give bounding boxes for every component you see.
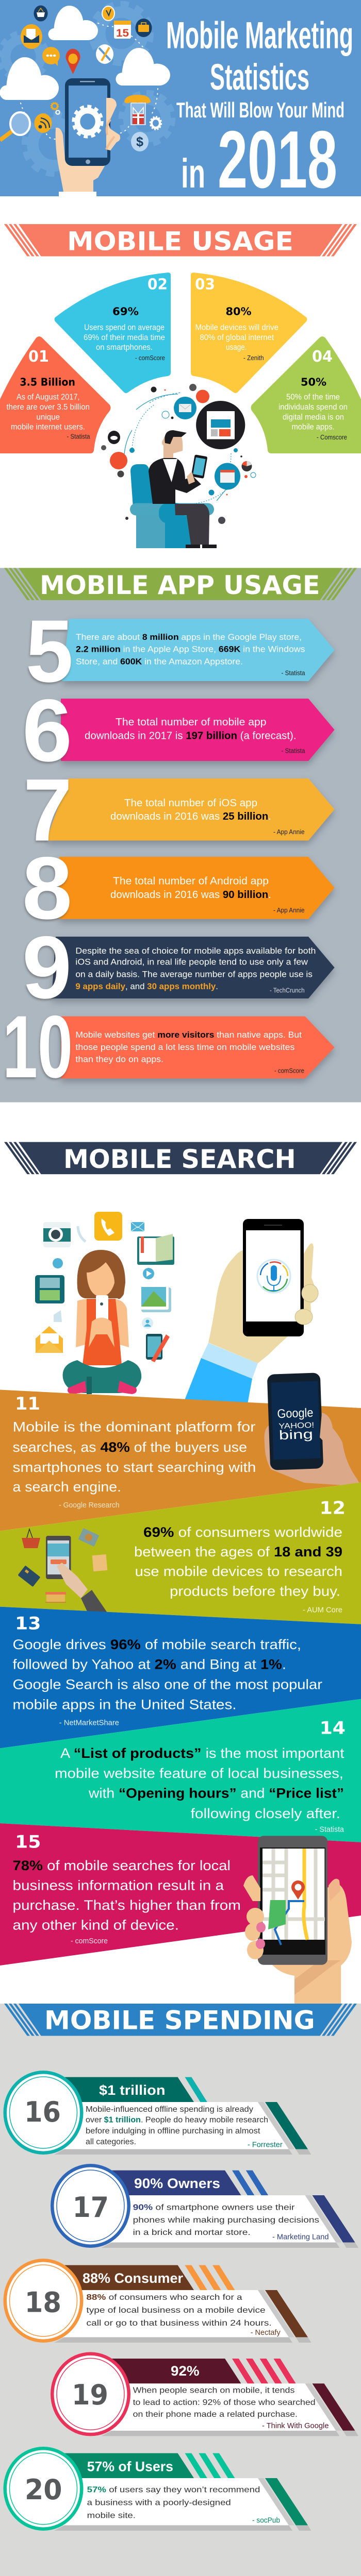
petal 01: there are over 3.5 billion bbox=[6, 403, 90, 412]
petal 03: 80% of global internet bbox=[200, 333, 274, 342]
petal 01: As of August 2017, bbox=[17, 393, 79, 401]
panel: stat 14 bbox=[0, 1699, 361, 1842]
stat 5: 5 bbox=[26, 602, 73, 701]
icon: calendar bbox=[114, 21, 131, 39]
stat 19: 92% bbox=[171, 2363, 200, 2379]
icon: phone tile bbox=[94, 1212, 122, 1241]
stat 20: 57% of users say they won’t recommend bbox=[87, 2485, 260, 2494]
stat 20: 57% of Users bbox=[87, 2459, 173, 2475]
panel: stat 15: business information result in a bbox=[12, 1878, 224, 1893]
icon: envelope bbox=[131, 1222, 144, 1231]
petal 04: 04 bbox=[312, 348, 333, 366]
stat 17 bbox=[51, 2164, 358, 2248]
panel: stat 11: a search engine. bbox=[12, 1479, 121, 1495]
banner: mobile usage bbox=[4, 224, 357, 257]
icon: rss bbox=[34, 113, 52, 133]
icon: briefcase bbox=[135, 19, 152, 37]
panel: stat 15: any other kind of device. bbox=[12, 1918, 179, 1933]
icon: camera bbox=[43, 1222, 71, 1247]
panel: stat 13: Google drives 96% of mobile search traffic, bbox=[12, 1637, 301, 1652]
stat 18: 88% Consumer bbox=[83, 2270, 183, 2286]
illustration: hand holding phone with search engines: bing bbox=[278, 1427, 313, 1443]
icon: dollar bbox=[131, 132, 149, 151]
stat 16: over $1 trillion. People do heavy mobile research bbox=[86, 2115, 268, 2124]
illustration: hand holding phone with search engines: YAHOO! bbox=[278, 1421, 315, 1431]
petal 01: - Statista bbox=[67, 432, 90, 440]
panel: header bbox=[0, 0, 361, 205]
banner: mobile usage: MOBILE USAGE bbox=[67, 227, 293, 257]
panel: stat 11: Mobile is the dominant platform for bbox=[12, 1419, 256, 1434]
stat 9: 9 apps daily, and 30 apps monthly. bbox=[75, 982, 218, 991]
stat 18: call or go to that business within 24 hours. bbox=[86, 2319, 272, 2328]
banner: mobile app usage: MOBILE APP USAGE bbox=[40, 570, 320, 600]
panel: stat 14: mobile website feature of local businesses, bbox=[55, 1766, 343, 1781]
stat 19: - Think With Google bbox=[262, 2422, 329, 2430]
stat 10: - comScore bbox=[274, 1067, 304, 1075]
panel: stat 13: - NetMarketShare bbox=[59, 1718, 119, 1727]
panel: stat 14: - Statista bbox=[315, 1825, 344, 1834]
banner: mobile spending: MOBILE SPENDING bbox=[44, 2006, 315, 2036]
icon: calendar: 15 bbox=[116, 27, 129, 39]
banner: mobile search: MOBILE SEARCH bbox=[63, 1144, 296, 1174]
stat 8: 8 bbox=[22, 839, 72, 938]
title: in bbox=[181, 150, 205, 196]
stat 19: 19 bbox=[72, 2379, 108, 2411]
stat 18 bbox=[3, 2259, 311, 2343]
icon: magnifier bbox=[0, 112, 30, 140]
stat 5: There are about 8 million apps in the Google Play store, bbox=[76, 633, 302, 642]
illustration: hand with voice-search phone bbox=[183, 1219, 318, 1404]
panel: stat 11 bbox=[0, 1372, 361, 1531]
stat 5 bbox=[26, 602, 335, 701]
panel: stat 15: 78% of mobile searches for local bbox=[12, 1858, 231, 1873]
panel: stat 11: searches, as 48% of the buyers use bbox=[12, 1439, 247, 1455]
panel: stat 13 bbox=[0, 1607, 361, 1748]
icon: basket bbox=[34, 5, 47, 22]
petal 02: Users spend on average bbox=[84, 324, 165, 332]
stat 5: Store, and 600K in the Amazon Appstore. bbox=[76, 657, 243, 666]
petal 01: unique bbox=[36, 413, 60, 421]
petal 04: individuals spend on bbox=[278, 403, 348, 412]
petal 03 bbox=[191, 273, 307, 393]
woman bbox=[63, 1250, 141, 1394]
stat 16 bbox=[3, 2071, 311, 2155]
stat 17: 17 bbox=[73, 2191, 109, 2224]
icon: clock bbox=[102, 6, 114, 21]
stat 20: mobile site. bbox=[87, 2512, 136, 2520]
petal 04 bbox=[251, 336, 361, 453]
icon: email bbox=[21, 24, 42, 49]
stat 18: 88% of consumers who search for a bbox=[86, 2293, 242, 2302]
stat 8: The total number of Android app bbox=[113, 876, 269, 887]
petal 01 bbox=[0, 336, 110, 453]
stat 8 bbox=[22, 839, 335, 938]
stat 16: 16 bbox=[24, 2096, 61, 2128]
stat 9: 9 bbox=[22, 918, 72, 1017]
panel: stat 15: - comScore bbox=[71, 1937, 108, 1945]
petal 03: - Zenith bbox=[243, 354, 264, 362]
stat 9 bbox=[22, 918, 335, 1017]
stat 17: phones while making purchasing decisions bbox=[133, 2216, 319, 2225]
panel: stat 15: 15 bbox=[15, 1832, 41, 1852]
stat 16: all categories. bbox=[86, 2138, 136, 2146]
stat 7: 7 bbox=[23, 760, 72, 859]
panel: mobile app usage bbox=[0, 568, 361, 1103]
panel: stat 13: followed by Yahoo at 2% and Bing at 1%. bbox=[12, 1657, 286, 1672]
icon: speech bubble bbox=[42, 47, 60, 66]
panel: mobile spending bbox=[0, 2004, 361, 2576]
petal 01: mobile internet users. bbox=[11, 422, 85, 432]
stat 10: 10 bbox=[3, 997, 73, 1096]
stat 18: - Nectafy bbox=[251, 2329, 281, 2337]
petal 02: 69% bbox=[112, 306, 139, 318]
stat 18: type of local business on a mobile device bbox=[86, 2306, 266, 2315]
panel: mobile usage fan bbox=[0, 273, 361, 548]
stat 10: those people spend a lot less time on mobile websites bbox=[75, 1043, 294, 1052]
stat 6: - Statista bbox=[282, 747, 305, 754]
petal 01: 01 bbox=[28, 348, 49, 366]
icon: pictures bbox=[140, 1286, 171, 1312]
panel: stat 15: purchase. That’s higher than from bbox=[12, 1897, 241, 1913]
panel: stat 12: 69% of consumers worldwide bbox=[143, 1524, 342, 1540]
stat 16: before indulging in offline purchasing in almost bbox=[86, 2127, 260, 2136]
stat 20: - socPub bbox=[252, 2517, 280, 2525]
icon: film bbox=[35, 1275, 64, 1303]
panel: stat 12 bbox=[0, 1482, 361, 1624]
stat 16: Mobile-influenced offline spending is already bbox=[86, 2105, 253, 2114]
stat 6: The total number of mobile app bbox=[116, 717, 266, 728]
stat 9: Despite the sea of choice for mobile apps available for both bbox=[75, 946, 316, 956]
stat 7 bbox=[23, 760, 335, 859]
panel: stat 12: use mobile devices to research bbox=[135, 1564, 342, 1579]
icon: map pin bbox=[66, 49, 80, 74]
icon: dollar: $ bbox=[136, 134, 144, 149]
stat 18: 18 bbox=[25, 2286, 61, 2318]
icon: gift shop bbox=[124, 95, 151, 125]
stat 19 bbox=[51, 2352, 358, 2436]
stat 9: iOS and Android, in real life people tend to use only a few bbox=[75, 958, 308, 967]
panel: stat 12: - AUM Core bbox=[303, 1606, 342, 1615]
panel: stat 13: 13 bbox=[15, 1614, 41, 1634]
stat 7: - App Annie bbox=[273, 828, 305, 836]
petal 03: Mobile devices will drive bbox=[195, 324, 278, 332]
stat 6 bbox=[22, 681, 335, 780]
petal 04: 50% of the time bbox=[286, 393, 340, 401]
stat 19: to lead to action: 92% of those who searched bbox=[133, 2398, 316, 2407]
petal 02: 69% of their media time bbox=[84, 333, 165, 342]
panel: stat 12: between the ages of 18 and 39 bbox=[134, 1544, 342, 1560]
petal 01: 3.5 Billion bbox=[20, 376, 75, 388]
stat 16: - Forrester bbox=[248, 2141, 283, 2149]
stat 20 bbox=[3, 2447, 311, 2531]
icon: tools bbox=[96, 44, 113, 64]
petal 02: - comScore bbox=[135, 354, 165, 362]
panel: stat 15 bbox=[0, 1823, 361, 2004]
petal 04: mobile apps. bbox=[292, 422, 335, 432]
petal 03: 03 bbox=[195, 275, 215, 293]
panel: stat 11: - Google Research bbox=[59, 1501, 120, 1510]
panel: stat 14: following closely after. bbox=[191, 1806, 340, 1821]
panel: stat 14: A “List of products” is the most important bbox=[60, 1745, 344, 1761]
petal 04: digital media is on bbox=[283, 413, 344, 421]
petal 04: - Comscore bbox=[317, 433, 347, 441]
icon: book bbox=[137, 1234, 174, 1265]
stat 9: - TechCrunch bbox=[270, 986, 305, 994]
illustration: hand holding phone with search engines bbox=[264, 1372, 361, 1486]
stat 9: on a daily basis. The average number of apps people use is bbox=[75, 970, 313, 979]
stat 6: 6 bbox=[22, 681, 72, 780]
petal 03: usage. bbox=[226, 343, 247, 352]
icon: dotted links bbox=[21, 23, 158, 139]
illustration: mobile shopping bbox=[18, 1528, 107, 1613]
stat 7: The total number of iOS app bbox=[124, 798, 257, 809]
stat 20: 20 bbox=[25, 2473, 62, 2506]
stat 5: 2.2 million in the Apple App Store, 669K in the Windows bbox=[76, 645, 305, 654]
stat 10: Mobile websites get more visitors than native apps. But bbox=[75, 1030, 302, 1040]
panel: stat 11: 11 bbox=[15, 1394, 40, 1414]
illustration: hand holding phone bbox=[56, 78, 120, 196]
illustration: hand with map phone bbox=[243, 1836, 352, 2004]
illustration: man on armchair with phone bbox=[101, 384, 256, 548]
stat 17: 90% of smartphone owners use their bbox=[133, 2203, 295, 2212]
icon: speech bubble: ••• bbox=[46, 52, 56, 60]
stat 17: 90% Owners bbox=[134, 2176, 220, 2191]
stat 17: in a brick and mortar store. bbox=[133, 2228, 251, 2237]
stat 10: than they do on apps. bbox=[75, 1055, 163, 1064]
stat 6: downloads in 2017 is 197 billion (a forecast). bbox=[85, 731, 296, 742]
stat 5: - Statista bbox=[282, 669, 305, 676]
banner: mobile search bbox=[4, 1142, 357, 1174]
panel: stat 14: with “Opening hours” and “Price list” bbox=[88, 1786, 344, 1801]
stat 8: downloads in 2016 was 90 billion. bbox=[110, 889, 271, 901]
stat 19: When people search on mobile, it tends bbox=[133, 2386, 294, 2395]
stat 17: - Marketing Land bbox=[272, 2233, 329, 2242]
petal 02 bbox=[55, 273, 171, 393]
title bbox=[166, 15, 353, 205]
petal 02: 02 bbox=[147, 275, 168, 293]
illustration: woman with phone and app icons bbox=[35, 1212, 174, 1394]
stat 20: a business with a poorly-designed bbox=[87, 2499, 231, 2507]
panel: stat 13: mobile apps in the United States. bbox=[12, 1697, 236, 1713]
icon: phone and pencil bbox=[146, 1334, 170, 1362]
panel: stat 12: 12 bbox=[320, 1498, 346, 1519]
petal 03: 80% bbox=[226, 306, 252, 318]
panel: stat 12: products before they buy. bbox=[170, 1584, 340, 1599]
panel: stat 13: Google Search is also one of the most popular bbox=[12, 1677, 322, 1692]
petal 02: on smartphones. bbox=[96, 343, 153, 352]
illustration: hand holding phone with search engines: Google bbox=[277, 1406, 314, 1421]
stat 7: downloads in 2016 was 25 billion. bbox=[110, 811, 271, 822]
stat 10 bbox=[3, 997, 335, 1096]
panel: stat 14: 14 bbox=[320, 1718, 346, 1739]
panel: stat 11: smartphones to start searching with bbox=[12, 1460, 256, 1475]
stat 8: - App Annie bbox=[273, 906, 305, 914]
stat 19: on their phone made a related purchase. bbox=[133, 2410, 298, 2419]
petal 04: 50% bbox=[301, 376, 326, 388]
stat 16: $1 trillion bbox=[99, 2082, 165, 2098]
icon: yellow mail bbox=[36, 1326, 63, 1353]
